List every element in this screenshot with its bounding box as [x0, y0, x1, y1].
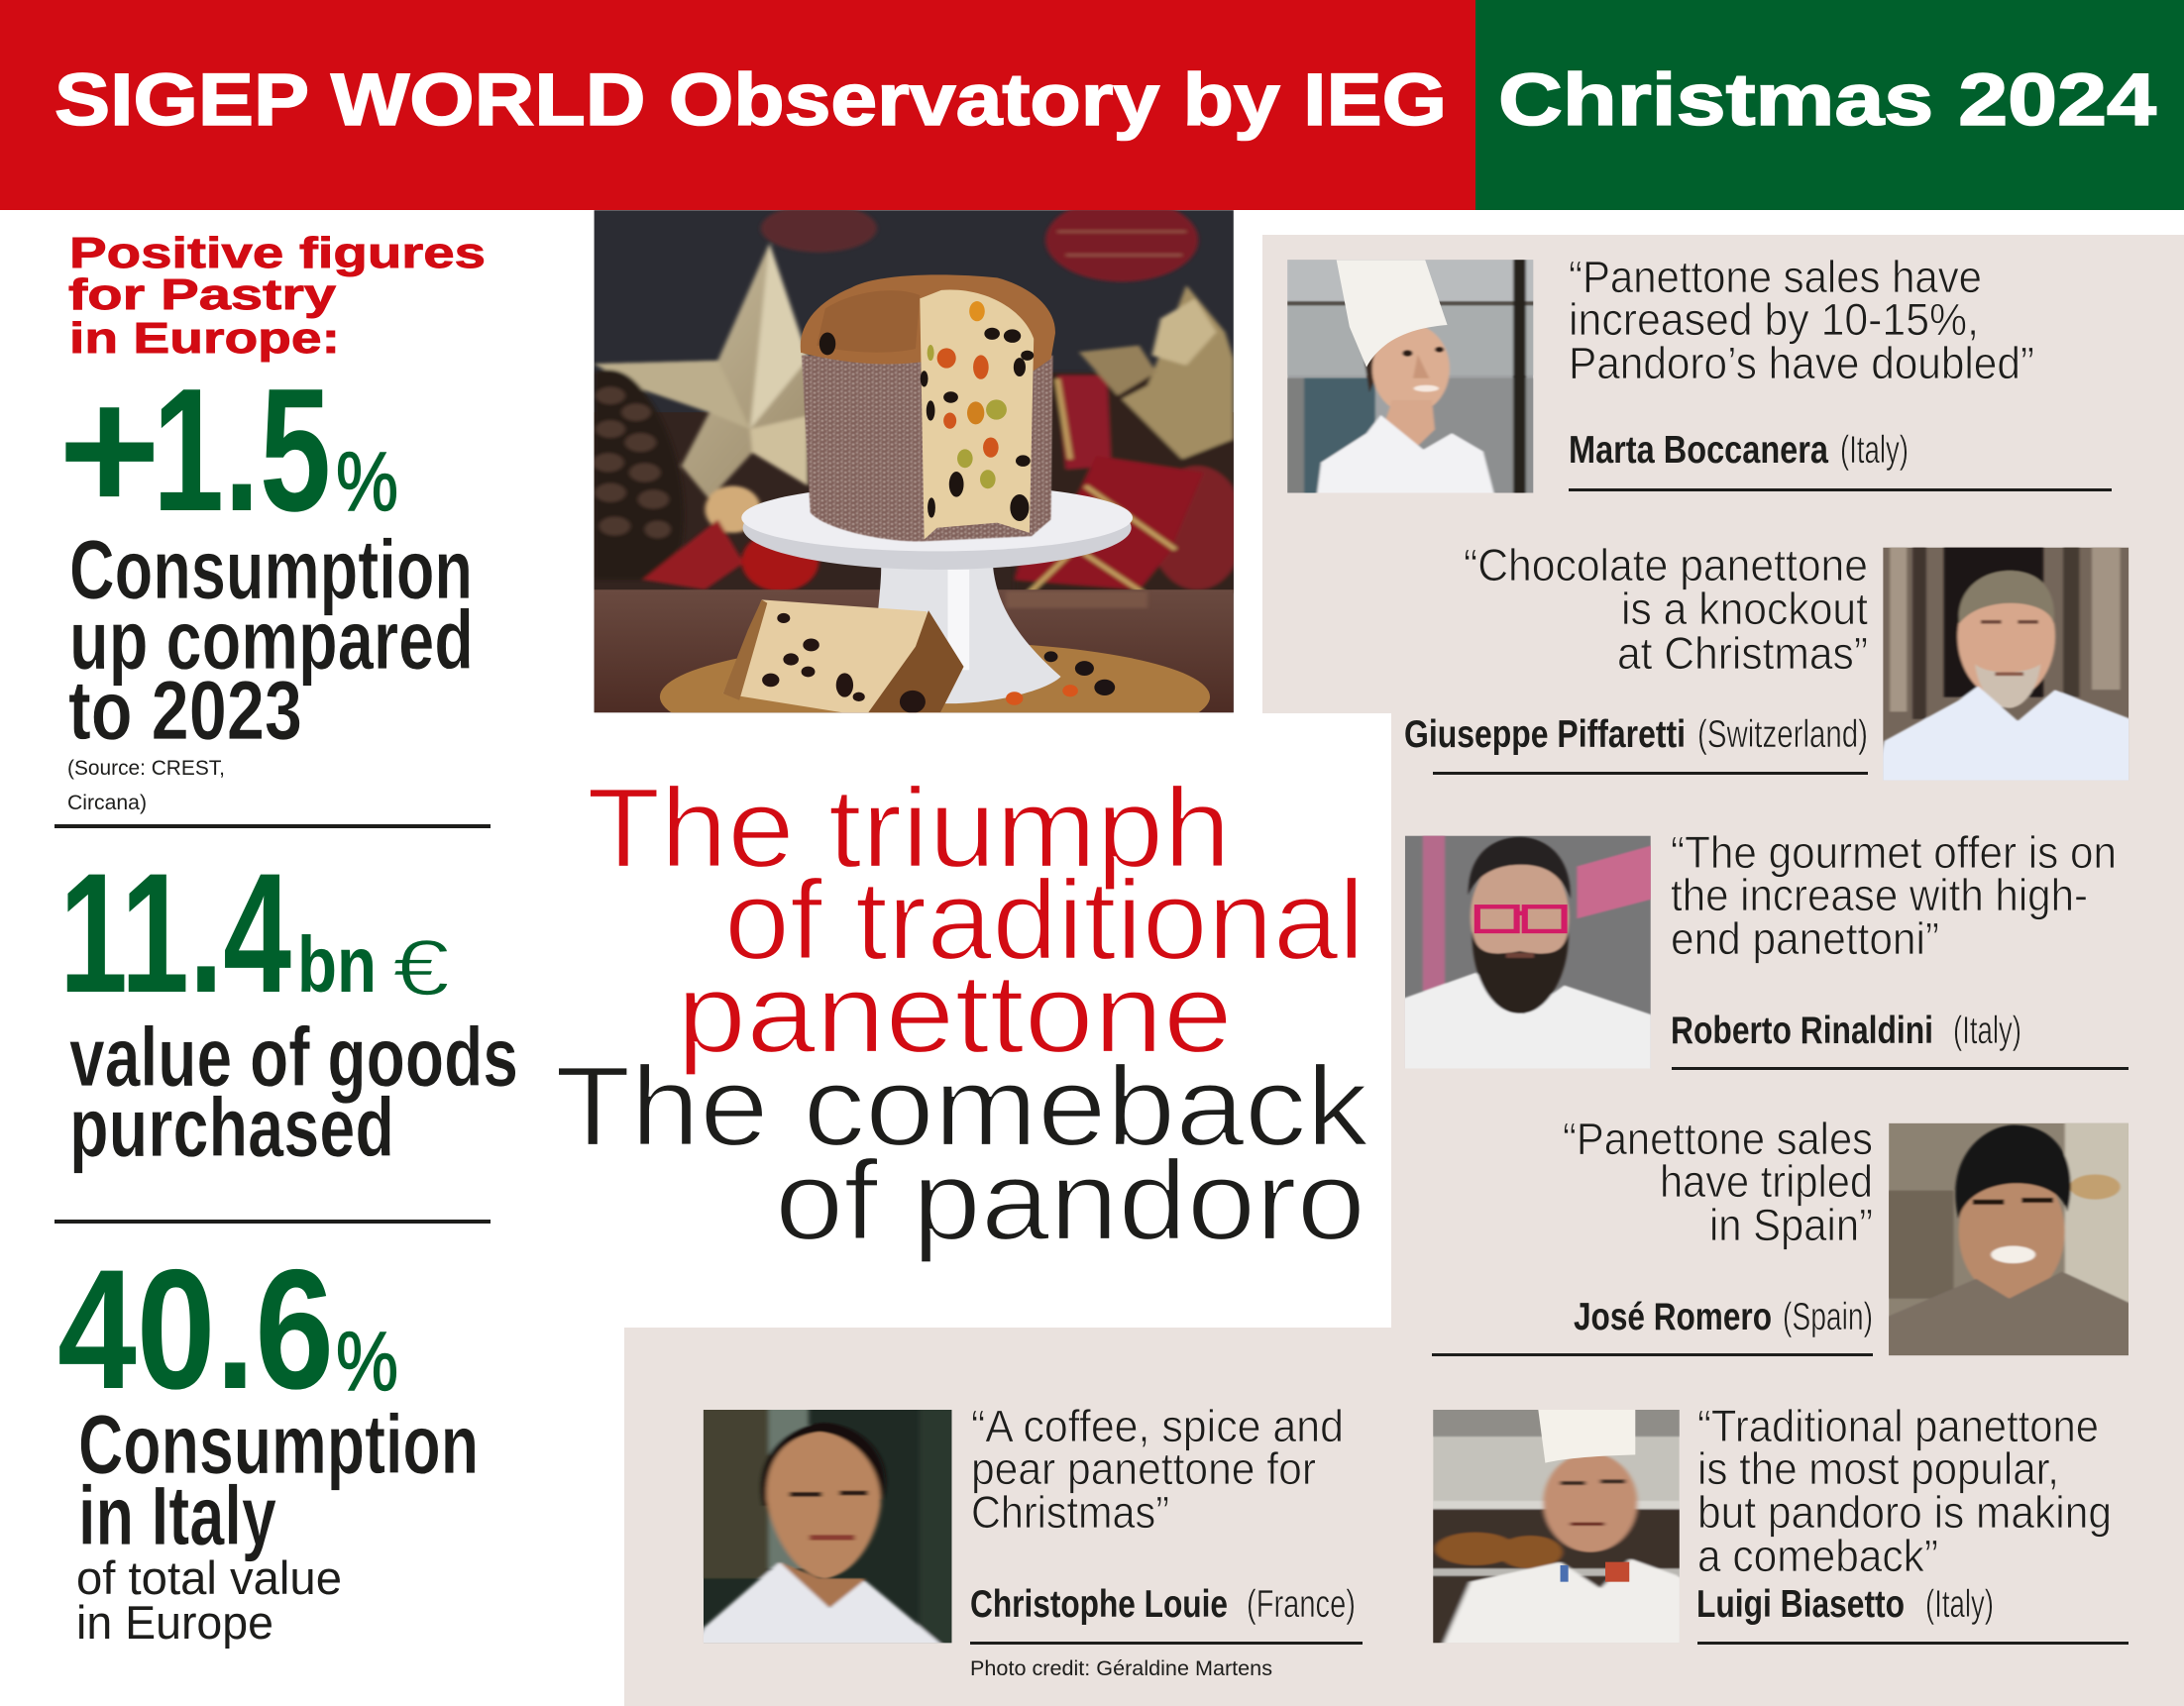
quote text: “Traditional panettone [1697, 1401, 2099, 1451]
quote text: Pandoro’s have doubled” [1569, 338, 2034, 388]
source note: Circana) [67, 792, 147, 814]
stat description: consumption up: Consumption [69, 523, 473, 616]
quote text [1464, 540, 1868, 679]
section heading: in Europe: [69, 314, 340, 363]
section heading [68, 229, 486, 363]
photo: panettone on cake stand [595, 210, 1234, 713]
panettone paper and crust [801, 274, 1055, 541]
attribution: (France) [1247, 1583, 1356, 1626]
quote text [1563, 1114, 1873, 1250]
stat description: value of goods: value of goods [69, 1011, 518, 1104]
quote text: in Spain” [1709, 1200, 1873, 1250]
scattered raisins and fruit [1006, 651, 1115, 705]
header band [0, 0, 2184, 210]
headline: the comeback of pandoro: of pandoro [775, 1138, 1365, 1264]
quote text: end panettoni” [1671, 913, 1939, 964]
quote text: a comeback” [1697, 1531, 1938, 1581]
stat: +1.5%: 1.5 [153, 352, 331, 548]
attribution: (Switzerland) [1697, 713, 1868, 756]
quote text: is the most popular, [1697, 1443, 2059, 1494]
quote card: Christophe Louie [690, 1401, 1363, 1680]
stat: 40.6%: % [336, 1315, 398, 1408]
quote text [1569, 252, 2034, 388]
headline: the triumph of traditional panettone: of traditional [724, 858, 1365, 984]
header: red title block [0, 0, 1475, 210]
stat description: consumption in Italy: Consumption [78, 1398, 479, 1491]
panettone slice [723, 599, 964, 713]
attribution: Marta Boccanera [1569, 429, 1828, 472]
stat description: consumption up: to 2023 [68, 664, 302, 757]
stat description: value of goods [69, 1011, 518, 1174]
quote text: “A coffee, spice and [971, 1401, 1344, 1451]
quote text: have tripled [1660, 1156, 1873, 1207]
stat description: consumption up: up compared [69, 593, 474, 687]
stat: +1.5%: + [58, 352, 161, 548]
portrait: Giuseppe Piffaretti [1883, 547, 2129, 781]
portrait: Roberto Rinaldini [1405, 836, 1651, 1068]
header: green date block [1475, 0, 2184, 210]
quote text: at Christmas” [1617, 628, 1868, 679]
source note: (Source: CREST, [67, 757, 225, 780]
headline: the comeback of pandoro: The comeback [555, 1044, 1369, 1170]
stat: +1.5%: % [336, 435, 398, 528]
central headline [555, 766, 1369, 1264]
quote text [1697, 1401, 2112, 1581]
quote text: but pandoro is making [1697, 1487, 2112, 1538]
stat: 11.4bn euro: bn [297, 920, 377, 1009]
quote text: Christmas” [971, 1487, 1169, 1538]
portrait: Luigi Biasetto [1425, 1407, 1686, 1652]
quote text: “Panettone sales [1563, 1114, 1873, 1164]
attribution: Giuseppe Piffaretti [1404, 713, 1686, 756]
header title: SIGEP WORLD Observatory by IEG [55, 58, 1447, 141]
quote card: Giuseppe Piffaretti [1404, 540, 2140, 789]
quote text: is a knockout [1621, 584, 1868, 634]
quote card: Marta Boccanera [1281, 252, 2112, 506]
attribution: (Italy) [1953, 1010, 2021, 1052]
quote text: “The gourmet offer is on [1671, 827, 2117, 878]
attribution: Roberto Rinaldini [1671, 1010, 1933, 1052]
quote text: increased by 10-15%, [1569, 294, 1979, 345]
stat description: value of goods: purchased [69, 1081, 394, 1174]
quote card: Luigi Biasetto [1425, 1401, 2129, 1652]
headline: the triumph of traditional panettone: panettone [677, 951, 1233, 1077]
headline: the triumph of traditional panettone [587, 766, 1365, 1077]
quote text: the increase with high- [1671, 870, 2088, 920]
left column: key figures [55, 229, 518, 1649]
quote text [971, 1401, 1344, 1538]
attribution: José Romero [1574, 1296, 1772, 1338]
stat: 11.4bn euro: 11.4 [59, 838, 291, 1028]
stat note: of total value in Europe: of total value [76, 1551, 342, 1604]
stat description: consumption in Italy [78, 1398, 479, 1562]
stat description: consumption in Italy: in Italy [78, 1469, 276, 1562]
section heading: for Pastry [68, 270, 337, 319]
quote card: José Romero [1432, 1114, 2135, 1363]
stat: 40.6%: 40.6 [57, 1234, 334, 1425]
quote text: pear panettone for [971, 1443, 1316, 1494]
header date: Christmas 2024 [1498, 58, 2156, 141]
attribution: (Spain) [1783, 1296, 1873, 1338]
headline: the triumph of traditional panettone: The triumph [587, 766, 1231, 892]
photo credit: Photo credit: Géraldine Martens [970, 1657, 1272, 1680]
stat description: consumption up [68, 523, 474, 757]
portrait: José Romero [1883, 1119, 2135, 1363]
attribution: (Italy) [1840, 429, 1909, 472]
quote text: “Chocolate panettone [1464, 540, 1868, 590]
section heading: Positive figures [69, 229, 486, 277]
cake stand [741, 484, 1133, 703]
quote text [1671, 827, 2117, 964]
attribution: Christophe Louie [970, 1583, 1228, 1626]
stat: 11.4bn euro: € [392, 923, 450, 1012]
stat note: of total value in Europe: in Europe [76, 1596, 273, 1649]
portrait: Marta Boccanera [1287, 260, 1534, 493]
quote text: “Panettone sales have [1569, 252, 1982, 302]
portrait: Christophe Louie [704, 1410, 951, 1643]
attribution: Luigi Biasetto [1696, 1583, 1905, 1626]
headline: the comeback of pandoro [555, 1044, 1369, 1264]
attribution: (Italy) [1925, 1583, 1994, 1626]
quote card: Roberto Rinaldini [1397, 827, 2129, 1075]
source note [67, 757, 225, 814]
stat note: of total value in Europe [76, 1551, 342, 1649]
background panel: beige quotes area [624, 235, 2184, 1706]
